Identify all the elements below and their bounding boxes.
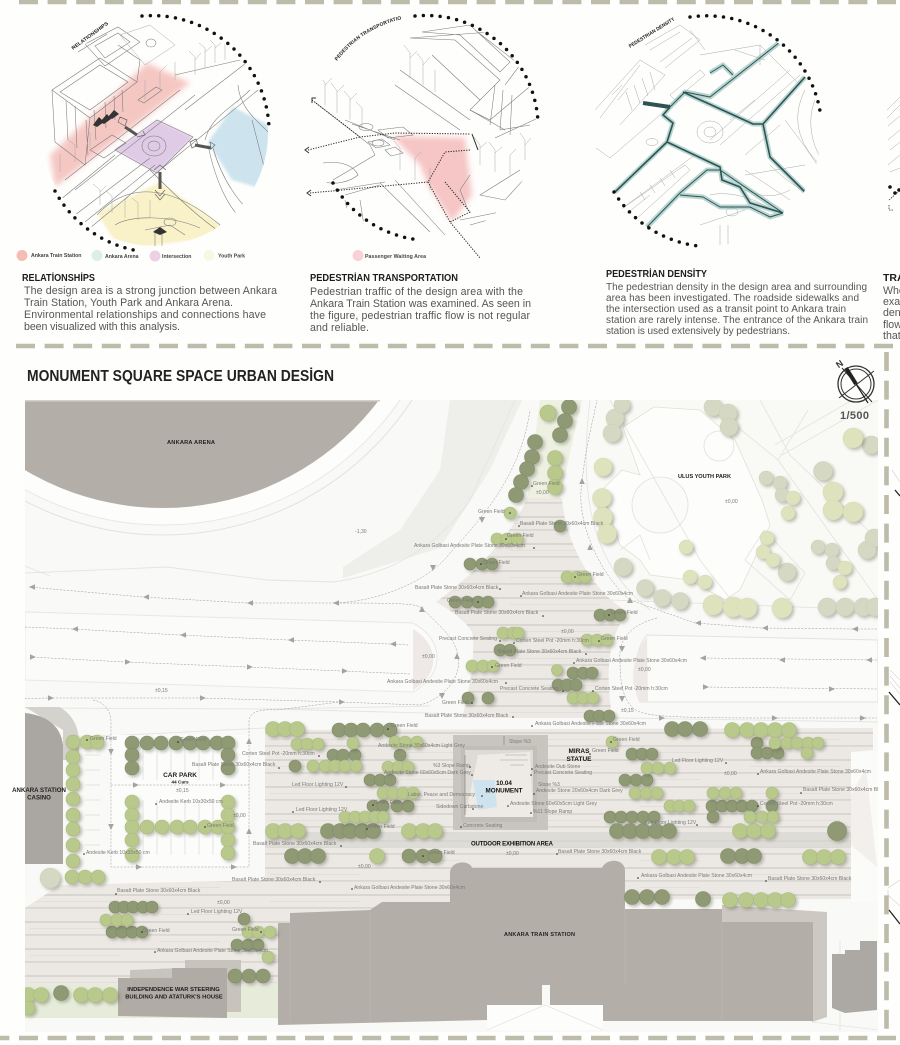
plan annotations: %11 Slope Ramp [533,809,572,815]
heading: RELATİONSHİPS [22,271,95,284]
heading: PEDESTRİAN DENSİTY [606,267,707,280]
text block: Pedestrian traffic of the design area with the [310,286,523,298]
left traffic island [25,612,437,692]
plan annotations: Andesite Kerb 10x30x50 cm [86,850,150,856]
trees: pale green park canopy [592,428,863,618]
plan annotations: Ankara Golbasi Andesite Plate Stone 30x60x4cm [354,885,465,891]
plan annotations: -1,30 [355,529,367,535]
plan annotations: Slope %3 [509,739,531,745]
legend: Passenger Waiting Area [365,254,426,260]
plan annotations: Basalt Plate Stone 30x60x4cm Black [192,762,276,768]
text block: and reliable. [310,322,369,334]
text block: been visualized with this analysis. [24,321,180,333]
plan annotations: ±0,00 [506,851,519,857]
plan annotations: %3 Slope Ramp [433,763,470,769]
plan annotations: ±0,00 [422,654,435,660]
plan annotations: ±0,00 [536,490,549,496]
plan annotations: Basalt Plate Stone 30x60x4cm Black [520,521,604,527]
plan annotations: Green Field [483,560,510,566]
statue label [566,748,592,761]
plan annotations: ±0,15 [176,788,189,794]
plan annotations: Corten Steel Pot -20mm h:30cm [595,686,668,692]
plan annotations: Sidedown Curbstone [436,804,483,810]
car park label: 44 Cars [171,780,189,786]
plan annotations: Basalt Plate Stone 30x60x4cm Black [455,610,539,616]
plan annotations: Green Field [374,800,401,806]
plan annotations: ±0,00 [638,667,651,673]
plan annotations: ±0,00 [725,499,738,505]
text block: the intersection used as a transit point to Ankara train [606,304,846,315]
plan annotations: Andesite Stone 30x60x4cm Light Grey [378,743,465,749]
plan annotations: Ankara Golbasi Andesite Plate Stone 30x60x4cm [414,543,525,549]
plan annotations: Basalt Plate Stone 30x60x4cm Black [253,841,337,847]
station casino building [25,707,79,864]
plan annotations: Led Floor Lighting 12V [296,807,348,813]
plan annotations: Green Field [368,824,395,830]
plan annotations: Green Field [442,700,469,706]
plan annotations: Green Field [533,481,560,487]
text block: exa [883,296,900,308]
plan annotations: Andesite Stone 60x60x5cm Light Grey [510,801,597,807]
site plan [25,400,878,1030]
legend: Ankara Arena [105,254,139,260]
plan annotations: Precast Concrete Seating [500,686,558,692]
text block: The pedestrian density in the design area and surrounding [606,282,867,293]
plan annotations: Green Field [613,737,640,743]
statue label: MIRAS [569,748,590,755]
text block: station are rarely intense. The entrance of the Ankara train [606,315,868,326]
plan annotations: ±0,00 [233,813,246,819]
car park lanes [0,400,877,867]
car park label [163,772,197,784]
plan annotations: Andesite Stone 20x60x4cm Dark Grey [536,788,623,794]
building label [126,987,222,998]
plan annotations: Slope %3 [538,782,560,788]
plan annotations: ±0,15 [155,688,168,694]
statue label: STATUE [566,756,592,763]
trees: dark olive [54,400,846,1000]
building label: INDEPENDENCE WAR STEERING [127,987,220,993]
dotted circle arcs [333,15,538,239]
plan annotations: Precast Concrete Seating [439,636,497,642]
plan annotations: Ankara Golbasi Andesite Plate Stone 30x60x4cm [760,769,871,775]
north green strip [527,400,582,498]
plan annotations: Corten Steel Pot -20mm h:30cm [760,801,833,807]
isometric drawing: relationships [50,25,275,250]
park label: ULUS YOUTH PARK [678,474,731,480]
casino label: ANKARA STATION [12,787,66,794]
plan annotations [83,481,887,954]
independence war steering building [25,960,285,1018]
rotated label: RELATIONSHIPS [71,20,110,52]
Ulus Youth Park ground [603,400,878,608]
plan annotations: Labor, Peace and Democracy [408,792,476,798]
plan annotations: ±0,00 [217,900,230,906]
plan annotations: Basalt Plate Stone 30x60x4cm Black [498,649,582,655]
trees: pale park canopy [40,397,884,888]
plan annotations: Green Field [428,850,455,856]
plan annotations: Ankara Golbasi Andesite Plate Stone 30x60x4cm [641,873,752,879]
icon: north compass: N [834,358,845,370]
plan annotations: Concrete Seating [463,823,503,829]
isometric drawing fragment [887,97,900,172]
text block: the figure, pedestrian traffic flow is not regular [310,310,530,322]
monument square [453,735,548,830]
plan annotations: Led Floor Lighting 12V [672,758,724,764]
text block [24,285,277,333]
legend: Intersection [162,254,191,260]
plan annotations: Led Floor Lighting 12V [191,909,243,915]
isometric drawing: pedestrian transportation [312,25,540,235]
text block: Train Station, Youth Park and Ankara Arena. [24,297,233,309]
heading: PEDESTRİAN TRANSPORTATION [310,271,458,284]
plan annotations: Green Field [495,663,522,669]
north plaza paving [436,498,628,718]
plan annotations: Andesite Stone 60x60x5cm Dark Grey [384,770,471,776]
text block [883,285,900,342]
icon: north compass [834,358,874,403]
car park [85,735,214,855]
casino label: CASINO [27,794,51,802]
plan annotations: Green Field [507,533,534,539]
plan annotations: Ankara Golbasi Andesite Plate Stone 30x60x4cm [535,721,646,727]
plan annotations: Precast Concrete Seating [534,770,592,776]
pedestrian flow dotted arrows [308,100,480,258]
plan annotations: Green Field [207,823,234,829]
plan annotations: Led Floor Lighting 12V [292,782,344,788]
Ankara Train Station building [278,861,878,1030]
plan annotations: Basalt Plate Stone 30x60x4cm Black [558,849,642,855]
building label: BUILDING AND ATATURK'S HOUSE [125,994,223,1000]
monument label: MONUMENT [485,788,523,794]
small east building [832,941,877,1013]
plan annotations: Basalt Plate Stone 30x60x4cm Black [232,877,316,883]
Ankara Arena building [25,402,378,508]
dotted circle arcs [614,16,821,246]
legend: Youth Park [218,254,245,260]
plan annotations: Led Floor Lighting 12V [645,820,697,826]
southwest paving [25,880,460,985]
title: MONUMENT SQUARE SPACE URBAN DESİGN [27,368,334,385]
plan annotations: Green Field [478,509,505,515]
flow arrowheads [305,98,316,196]
plan annotations: Green Field [577,572,604,578]
plan annotations: Green Field [611,610,638,616]
text block [606,282,868,337]
plan annotations: ±0,00 [561,629,574,635]
plan annotations: Ankara Golbasi Andesite Plate Stone 30x60x4cm [576,658,687,664]
plan annotations: Green Field [180,737,207,743]
trees: bright green [20,405,846,1015]
text block: area has been investigated. The roadside sidewalks and [606,293,859,304]
plan annotations: Green Field [90,736,117,742]
panel: traffic analysis, cropped at right edge [883,97,900,342]
dotted arc and arrow fragment [888,185,900,210]
plan annotations: Ankara Golbasi Andesite Plate Stone 30x60x4cm [522,591,633,597]
plan annotations: Green Field [447,598,474,604]
plan annotations: Basalt Plate Stone 30x60x4cm Black [425,713,509,719]
plan annotations: Corten Steel Pot -20mm h:30cm [516,638,589,644]
panel: pedestrian density [595,16,868,337]
text block: The design area is a strong junction between Ankara [24,285,277,297]
car park label: CAR PARK [163,772,197,779]
text block: Ankara Train Station was examined. As seen in [310,298,531,310]
rotated label: PEDESTRIAN DENSITY [628,16,677,50]
panel: relationships analysis [16,16,277,333]
legend: Ankara Train Station [31,253,81,259]
plan annotations: ±0,00 [724,771,737,777]
scale label: 1/500 [840,410,869,422]
legend [352,250,426,261]
casino label [12,787,66,802]
plan annotations: Green Field [391,723,418,729]
pale verge near arena [343,400,522,578]
arena outer ring [25,400,412,536]
plan annotations: Green Field [592,748,619,754]
plan annotations: ±0,15 [621,708,634,714]
plan annotations: ±0,00 [358,864,371,870]
plan annotations: Ankara Golbasi Andesite Plate Stone 30x60x4cm [157,948,268,954]
exhibition band [265,832,851,848]
panel: pedestrian transportation [304,14,540,334]
plan annotations: Basalt Plate Stone 30x60x4cm Black [415,585,499,591]
exhibition label: OUTDOOR EXHIBITION AREA [471,842,554,848]
text block: station is used extensively by pedestrians. [606,326,790,337]
plan annotations: Basalt Plate Stone 30x60x4cm Black [803,787,887,793]
plan annotations: Basalt Plate Stone 30x60x4cm Black [117,888,201,894]
text block: Environmental relationships and connections have [24,309,266,321]
road edge lines [25,400,878,740]
road arrows [29,478,872,870]
monument label: 10.04 [496,780,512,787]
plan annotations: Andesite Kerb 10x30x50 cm [159,799,223,805]
monument label [486,780,522,792]
plan annotations: Andesite Dub Stone [535,764,580,770]
text block [310,286,531,334]
plan annotations: Green Field [601,636,628,642]
isometric drawing: pedestrian density [595,25,822,245]
plan annotations: Green Field [143,928,170,934]
arena label: ANKARA ARENA [167,440,215,446]
dotted circle arcs [55,16,269,251]
legend [16,250,245,262]
plan annotations: Basalt Plate Stone 30x60x4cm Black [768,876,852,882]
station label: ANKARA TRAIN STATION [504,932,575,938]
south plaza paving [265,728,873,900]
plan annotations: Corten Steel Pot -20mm h:30cm [242,751,315,757]
plan annotations: Green Field [232,927,259,933]
right edge cropped drawing fragments [888,470,900,924]
right traffic island [635,635,878,702]
plan annotations: Ankara Golbasi Andesite Plate Stone 30x60x4cm [387,679,498,685]
